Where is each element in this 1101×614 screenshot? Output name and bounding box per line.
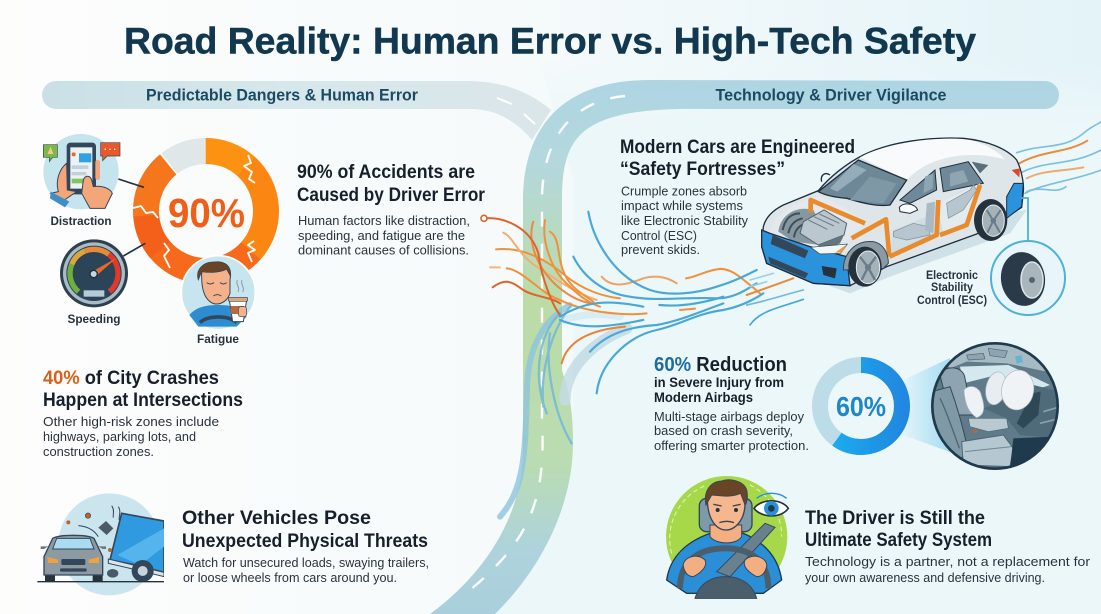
text block: driver is still: The Driver is Still the — [805, 507, 985, 529]
text block: 90% of accidents: Caused by Driver Error — [297, 184, 485, 206]
text block: 60% reduction: offering smarter protection. — [654, 438, 809, 453]
rear bumper — [1007, 183, 1023, 218]
label: speeding: Speeding — [68, 312, 120, 326]
text block: modern cars: “Safety Fortresses” — [620, 158, 785, 180]
illustration: car with safety cage — [747, 122, 1101, 325]
label: ESC — [917, 268, 987, 307]
icon: speedometer — [60, 239, 145, 307]
text block: other vehicles: Other Vehicles Pose — [182, 507, 371, 529]
headliner — [948, 344, 1046, 372]
front seat — [934, 386, 966, 458]
airbags — [964, 387, 984, 418]
roof — [860, 139, 1005, 180]
flow lines: orange and blue streams — [481, 212, 763, 517]
donut chart: 60% — [820, 358, 950, 452]
panel: driver error — [43, 126, 485, 346]
text block: 90% of accidents — [297, 161, 485, 258]
icon: car and truck crash — [37, 493, 164, 595]
windshield view — [960, 365, 1050, 388]
door interior — [890, 187, 977, 253]
centre console — [968, 418, 1008, 432]
text block: 40% of city crashes: highways, parking lots, and — [43, 429, 196, 444]
text block: 60% reduction — [654, 354, 809, 453]
illustration: airbag interior — [930, 342, 1060, 469]
orange safety cage — [811, 185, 980, 257]
label: ESC: Stability — [931, 280, 973, 294]
label: fatigue: Fatigue — [197, 332, 239, 346]
label: ESC: Control (ESC) — [917, 293, 987, 307]
donut chart: 90% — [121, 126, 291, 296]
text block: modern cars: prevent skids. — [621, 242, 700, 257]
icon: tired driver — [181, 256, 255, 330]
text block: modern cars — [620, 136, 855, 257]
right panel tint — [470, 60, 1101, 614]
text block: driver is still — [805, 507, 1091, 585]
windshield — [818, 160, 907, 205]
rear seats — [940, 368, 973, 415]
text block: driver is still: your own awareness and defensive driving. — [805, 570, 1045, 585]
hood with engine — [770, 196, 865, 248]
text block: modern cars: like Electronic Stability — [621, 213, 748, 228]
mirrors — [899, 204, 918, 213]
illustration: attentive driver — [666, 476, 788, 598]
icon: distraction phone — [43, 134, 144, 209]
text block: modern cars: Control (ESC) — [621, 228, 697, 243]
front bumper — [762, 230, 850, 286]
text block: other vehicles — [182, 507, 429, 585]
text block: driver is still: Technology is a partner, not a replacement for — [805, 554, 1091, 569]
text block: other vehicles: Unexpected Physical Threats — [182, 530, 428, 552]
heading: predictable dangers: Predictable Dangers & Human Error — [146, 86, 419, 104]
wind lines behind car — [747, 122, 1101, 325]
heading: technology: Technology & Driver Vigilance — [716, 86, 946, 104]
text block: other vehicles: Watch for unsecured loads, swaying trailers, — [183, 555, 429, 570]
trailhead dot — [481, 215, 487, 221]
wheels — [843, 242, 888, 270]
text block: 40% of city crashes: Other high-risk zones include — [43, 414, 219, 429]
big number: 60%: 60% — [836, 391, 886, 422]
label: distraction: Distraction — [50, 214, 112, 228]
text block: 60% reduction: 60% Reduction — [654, 354, 787, 376]
text block: 60% reduction: in Severe Injury from — [654, 374, 784, 390]
text block: modern cars: Crumple zones absorb — [621, 184, 747, 198]
road and right header band — [430, 80, 1059, 614]
side windows — [900, 170, 937, 203]
text block: 40% of city crashes: Happen at Intersections — [43, 389, 243, 411]
text block: 60% reduction: based on crash severity, — [654, 423, 793, 438]
shadow — [777, 210, 1027, 293]
text block: 60% reduction: Multi-stage airbags deploy — [654, 409, 804, 424]
text block: modern cars: impact while systems — [621, 198, 743, 213]
seats — [893, 223, 930, 240]
text block: 60% reduction: Modern Airbags — [654, 389, 753, 405]
text block: 90% of accidents: speeding, and fatigue are the — [298, 228, 465, 243]
text block: 90% of accidents: 90% of Accidents are — [297, 161, 475, 183]
label: ESC: Electronic — [926, 268, 978, 282]
text block: 90% of accidents: dominant causes of collisions. — [298, 242, 469, 258]
text block: modern cars: Modern Cars are Engineered — [620, 136, 855, 158]
dashboard — [983, 385, 1060, 438]
title: Road Reality: Human Error vs. High-Tech Safety — [124, 20, 976, 62]
text block: 40% of city crashes: 40% of City Crashes — [43, 367, 219, 389]
left header band — [42, 81, 551, 140]
text block: driver is still: Ultimate Safety System — [805, 529, 992, 551]
big number: 90%: 90% — [168, 190, 245, 236]
road centre dashes — [470, 96, 625, 590]
text block: other vehicles: or loose wheels from cars around you. — [183, 570, 397, 585]
text block: 40% of city crashes — [43, 367, 243, 459]
text block: 90% of accidents: Human factors like distraction, — [298, 213, 470, 228]
text block: 40% of city crashes: construction zones. — [43, 444, 154, 459]
icon: ESC tire callout — [991, 198, 1065, 315]
body — [762, 138, 1023, 286]
